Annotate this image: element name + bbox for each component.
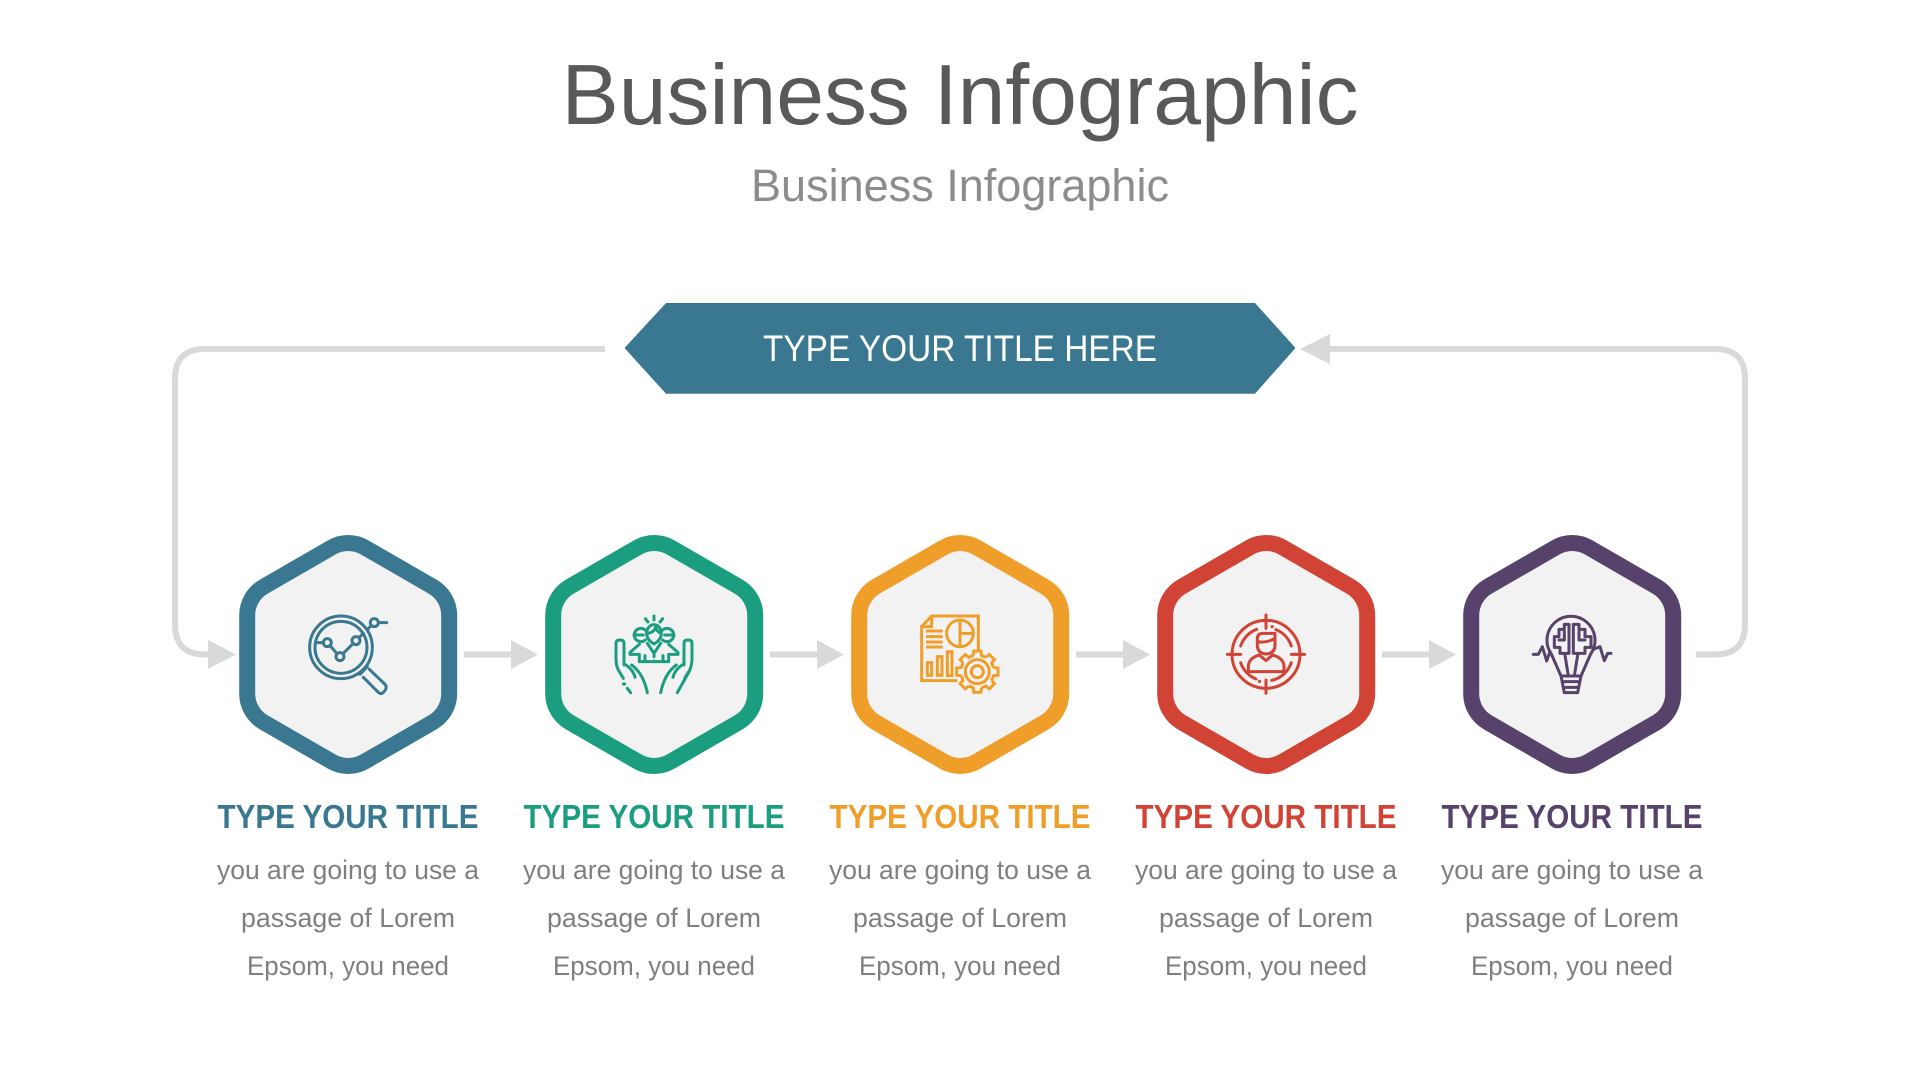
panel: step 4 <box>1135 543 1398 981</box>
panel: step 3 <box>829 543 1092 981</box>
step 5 text: passage of Lorem <box>1465 903 1679 933</box>
subtitle: Business Infographic <box>751 160 1169 211</box>
step 2 text: you are going to use a <box>523 855 786 885</box>
hexagon: green <box>553 543 755 766</box>
arrow: right feedback connector from last hexagon to banner <box>1300 334 1745 654</box>
step 5 text <box>1441 855 1704 981</box>
step 1 text: Epsom, you need <box>247 951 449 981</box>
step 3 text: Epsom, you need <box>859 951 1061 981</box>
step 4 text <box>1135 855 1398 981</box>
step 3 text: passage of Lorem <box>853 903 1067 933</box>
hexagon: red <box>1165 543 1367 766</box>
step 2 text: Epsom, you need <box>553 951 755 981</box>
panel: step 1 <box>217 543 480 981</box>
step 1 text: you are going to use a <box>217 855 480 885</box>
arrow: step 3 to step 4 <box>1076 640 1150 669</box>
step 5 text: Epsom, you need <box>1471 951 1673 981</box>
step 3 heading: TYPE YOUR TITLE <box>830 798 1090 835</box>
panel: step 5 <box>1441 543 1704 981</box>
step 2 text: passage of Lorem <box>547 903 761 933</box>
banner <box>624 303 1296 394</box>
step 4 text: Epsom, you need <box>1165 951 1367 981</box>
step 4 text: passage of Lorem <box>1159 903 1373 933</box>
step 4 heading: TYPE YOUR TITLE <box>1136 798 1396 835</box>
icon: light bulb with brain <box>1533 616 1611 693</box>
step 4 text: you are going to use a <box>1135 855 1398 885</box>
panel: step 2 <box>523 543 786 981</box>
step 1 text: passage of Lorem <box>241 903 455 933</box>
step 5 heading: TYPE YOUR TITLE <box>1442 798 1702 835</box>
arrow: step 4 to step 5 <box>1382 640 1456 669</box>
step 3 text: you are going to use a <box>829 855 1092 885</box>
hexagon: blue <box>247 543 449 766</box>
icon: magnifier with line chart <box>310 616 387 694</box>
arrow: step 1 to step 2 <box>464 640 538 669</box>
hexagon: purple <box>1471 543 1673 766</box>
arrow: step 2 to step 3 <box>770 640 844 669</box>
step 2 text <box>523 855 786 981</box>
icon: hands holding people <box>616 616 692 693</box>
title: Business Infographic <box>562 48 1358 143</box>
step 1 text <box>217 855 480 981</box>
icon: report with gear <box>922 616 998 692</box>
step 1 heading: TYPE YOUR TITLE <box>218 798 478 835</box>
hexagon: orange <box>859 543 1061 766</box>
step 3 text <box>829 855 1092 981</box>
banner: TYPE YOUR TITLE HERE <box>763 328 1157 369</box>
step 2 heading: TYPE YOUR TITLE <box>524 798 784 835</box>
step 5 text: you are going to use a <box>1441 855 1704 885</box>
arrow: left feedback connector from banner to first hexagon <box>175 349 605 669</box>
icon: person in target <box>1227 615 1305 693</box>
